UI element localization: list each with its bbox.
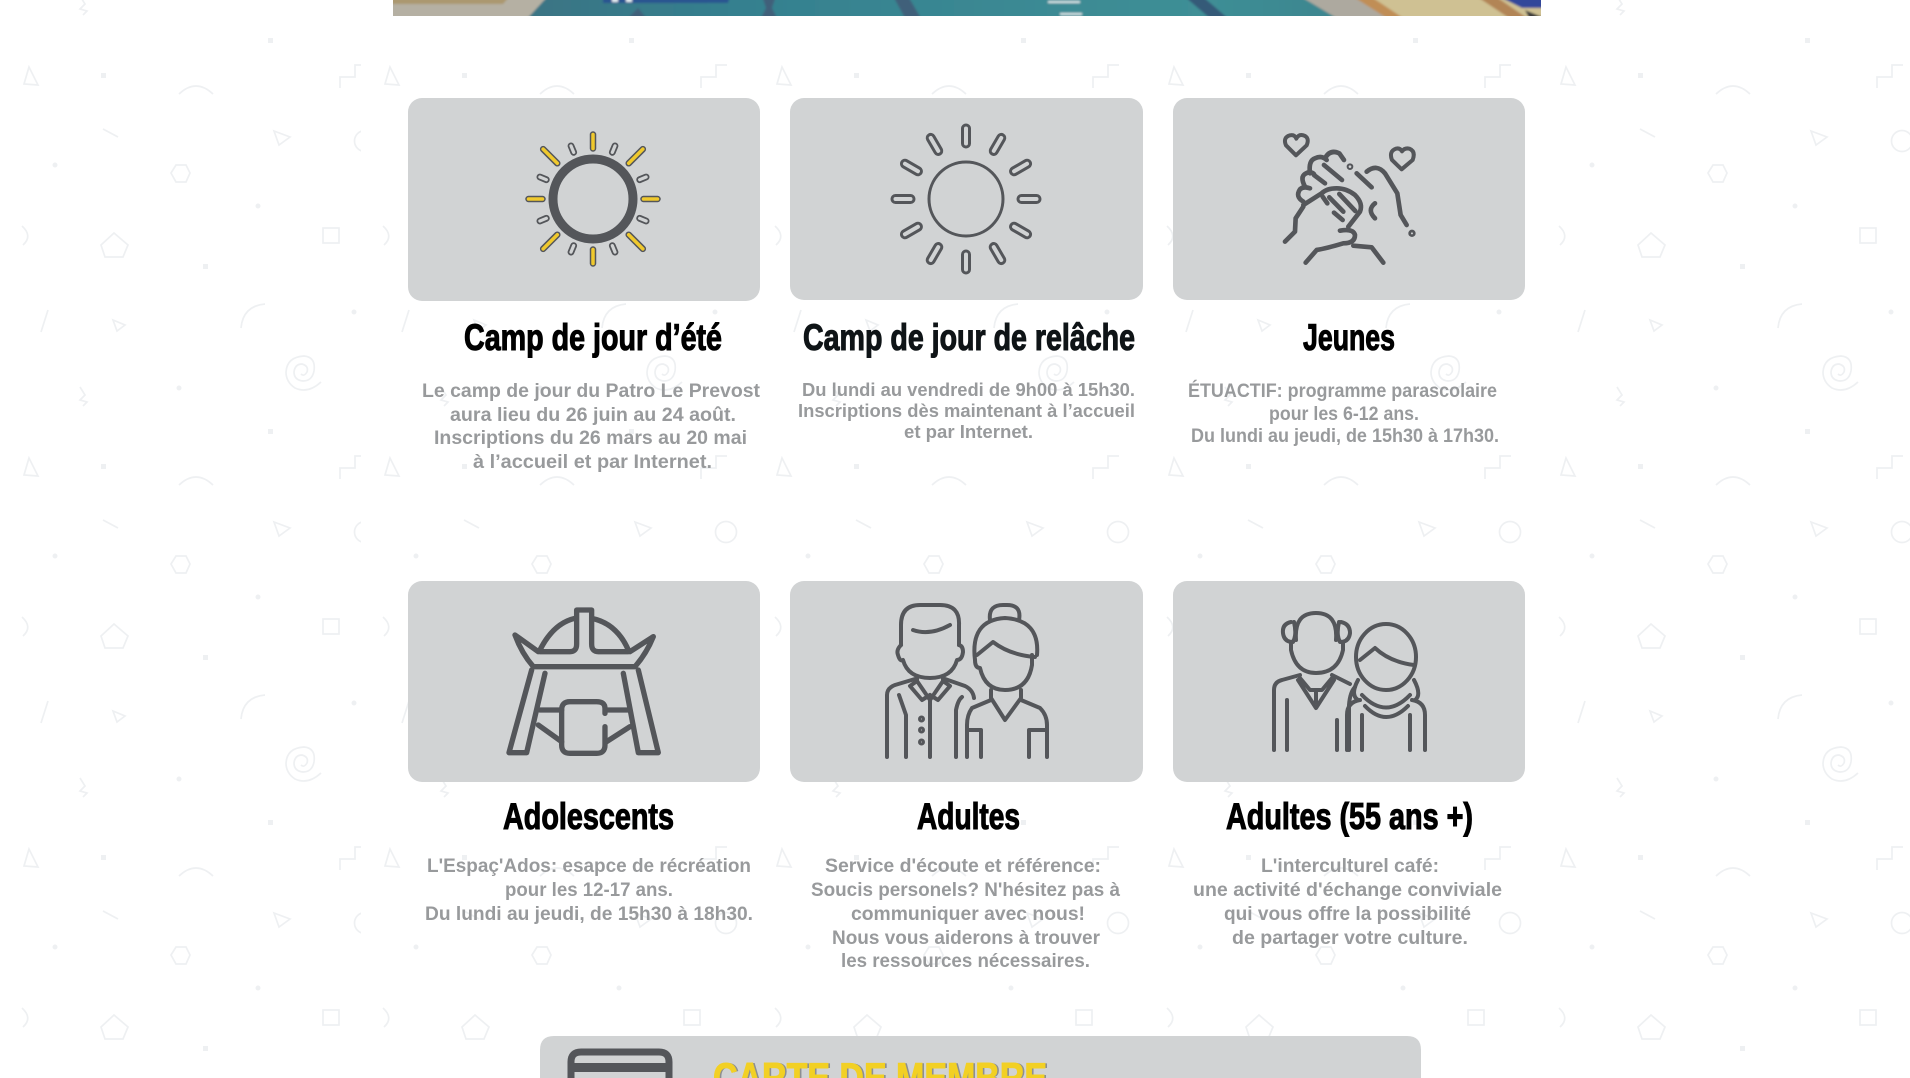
panel: adolescents [408, 581, 760, 925]
heading: Adolescents [503, 796, 674, 837]
icon: clasped hands with hearts [1285, 135, 1414, 263]
text block: L'interculturel café: [1261, 856, 1439, 877]
text block: de partager votre culture. [1232, 928, 1468, 949]
icon: sun with yellow rays [526, 132, 660, 266]
card background [790, 581, 1143, 782]
heading: Adultes [917, 796, 1020, 837]
panel: adultes 55 ans et plus [1173, 581, 1525, 949]
text block: une activité d'échange conviviale [1193, 880, 1502, 901]
text block: Inscriptions dès maintenant à l’accueil [798, 401, 1135, 421]
heading: Adultes (55 ans +) [1226, 796, 1473, 837]
text block [1188, 380, 1499, 447]
panel: carte de membre [540, 1036, 1421, 1078]
icon: man and woman [887, 605, 1047, 757]
text block [811, 856, 1120, 972]
text block: Le camp de jour du Patro Le Prevost [422, 381, 761, 402]
text block [798, 380, 1135, 442]
heading: Camp de jour de relâche [803, 317, 1135, 358]
card background [1173, 98, 1525, 300]
card background [408, 98, 760, 301]
text block: Nous vous aiderons à trouver [832, 928, 1101, 949]
text block: aura lieu du 26 juin au 24 août. [450, 405, 736, 426]
text block: et par Internet. [904, 422, 1033, 442]
text block: qui vous offre la possibilité [1224, 904, 1471, 925]
panel: camp de jour de relâche [790, 98, 1143, 442]
text block: Du lundi au vendredi de 9h00 à 15h30. [802, 380, 1135, 400]
heading: Camp de jour d’été [464, 317, 722, 358]
text block [425, 856, 753, 925]
card background [790, 98, 1143, 300]
text block: Du lundi au jeudi, de 15h30 à 18h30. [425, 904, 753, 925]
panel: adultes [790, 581, 1143, 972]
icon: membership card [571, 1052, 669, 1078]
text block: Soucis personels? N'hésitez pas à [811, 880, 1120, 901]
text block: ÉTUACTIF: programme parascolaire [1188, 380, 1497, 402]
text block: Du lundi au jeudi, de 15h30 à 17h30. [1191, 426, 1499, 447]
text block: Inscriptions du 26 mars au 20 mai [434, 428, 747, 449]
text block: pour les 6-12 ans. [1269, 404, 1419, 425]
text block: pour les 12-17 ans. [505, 880, 673, 901]
panel: camp de jour d'été [408, 98, 761, 473]
panel: jeunes [1173, 98, 1525, 447]
text block: les ressources nécessaires. [841, 951, 1090, 972]
hero photo: swimming pool strip [393, 0, 1541, 16]
card background [1173, 581, 1525, 782]
icon: helmet [509, 610, 658, 753]
card background [408, 581, 760, 782]
text block: communiquer avec nous! [851, 904, 1085, 925]
card background [540, 1036, 1421, 1078]
heading: Jeunes [1303, 317, 1395, 358]
text block [422, 381, 761, 473]
icon: thin sun [892, 125, 1040, 273]
text block: Service d'écoute et référence: [825, 856, 1101, 877]
text block: à l’accueil et par Internet. [473, 452, 712, 473]
text block [1193, 856, 1502, 949]
text block: L'Espaç'Ados: esapce de récréation [427, 856, 751, 877]
icon: senior couple [1274, 613, 1425, 750]
